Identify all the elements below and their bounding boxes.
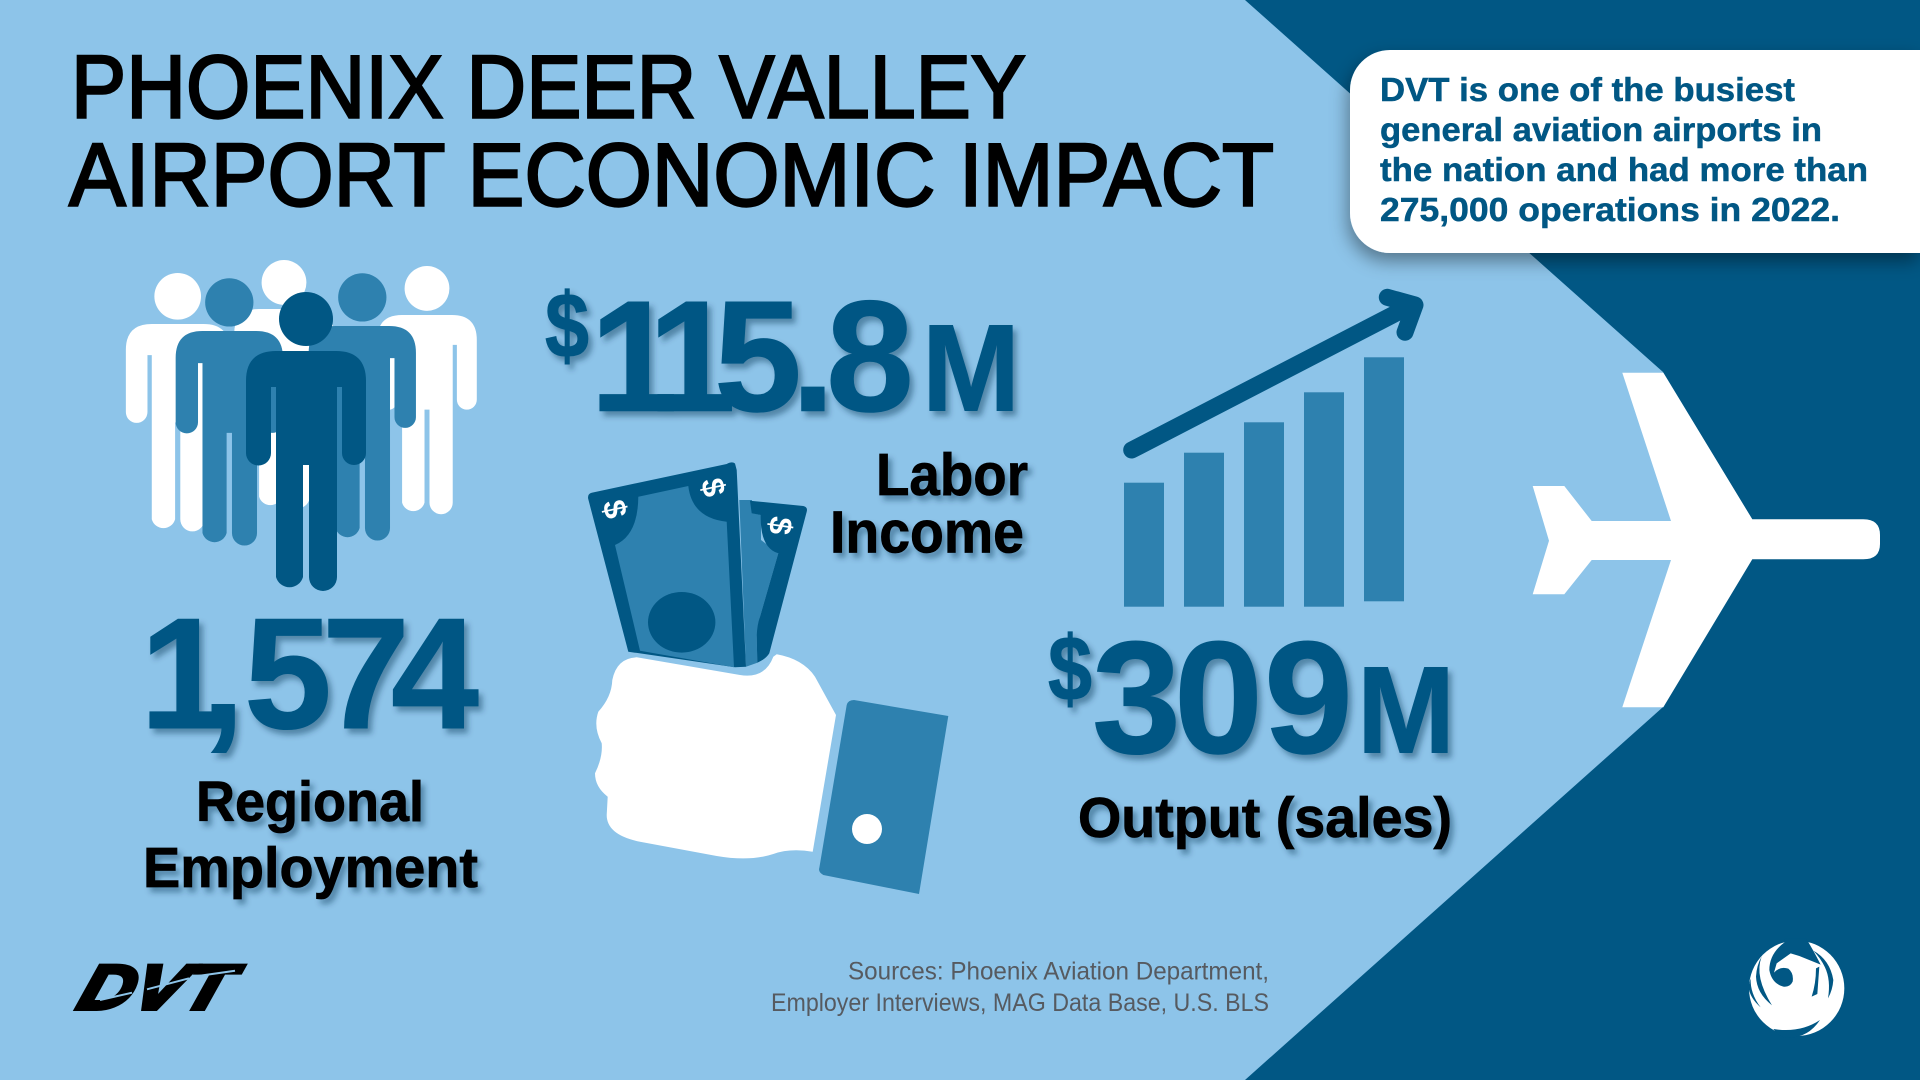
- dollar symbols: $: [762, 514, 800, 537]
- person: blue right: [309, 273, 416, 541]
- callout: busiest airport: the nation and had more than: [1380, 151, 1868, 188]
- callout: busiest airport: general aviation airports in: [1380, 111, 1822, 148]
- back bill: [739, 500, 807, 667]
- front bill: [588, 462, 746, 667]
- stat: output amount: $: [1048, 618, 1092, 720]
- callout: busiest airport: 275,000 operations in 2022.: [1380, 191, 1840, 228]
- stat: labor income amount: 115.8: [590, 269, 914, 445]
- person: blue left: [176, 278, 283, 546]
- label: labor income: Income: [830, 500, 1024, 566]
- person: dark front: [246, 292, 366, 591]
- icon: money bills: [588, 462, 807, 667]
- person: white left: [126, 273, 230, 531]
- title: PHOENIX DEER VALLEY: [71, 36, 1026, 136]
- stat: regional employment number: 1,574: [140, 586, 479, 762]
- stat: output amount: 309: [1092, 608, 1353, 787]
- logo: DVT: DVT: [71, 951, 250, 1023]
- dollar symbols: [596, 475, 800, 537]
- callout: busiest airport: [1350, 50, 1920, 253]
- icon: group of people: [126, 260, 477, 591]
- stat: labor income amount: [545, 269, 1020, 445]
- stat: labor income amount: M: [922, 301, 1020, 438]
- title: [69, 36, 1274, 224]
- label: regional employment: Employment: [143, 836, 478, 900]
- bar chart: [1124, 357, 1404, 607]
- dollar symbols: $: [694, 475, 733, 500]
- label: regional employment: [143, 770, 478, 900]
- panel: dark arrow-shaped background: [1245, 0, 1920, 1080]
- label: regional employment: Regional: [196, 770, 424, 834]
- icon: airplane: [1533, 373, 1880, 707]
- stat: output amount: M: [1357, 643, 1455, 780]
- text block: sources: Sources: Phoenix Aviation Department,: [848, 958, 1269, 986]
- label: labor income: Labor: [876, 442, 1028, 508]
- stat: labor income amount: $: [545, 275, 589, 377]
- callout: busiest airport: DVT is one of the busiest: [1380, 71, 1795, 108]
- icon: sleeve cuff with button: [819, 700, 948, 894]
- stat: output amount: [1048, 608, 1455, 787]
- label: labor income: [830, 442, 1028, 566]
- dollar symbols: $: [596, 497, 634, 522]
- icon: hand holding money: [595, 654, 836, 858]
- text block: sources: Employer Interviews, MAG Data Base, U.S. BLS: [771, 989, 1269, 1017]
- person: white back centre: [234, 260, 334, 508]
- person: white right: [377, 266, 477, 514]
- logo: city of Phoenix bird: [1748, 938, 1844, 1038]
- arrow: rising trend: [1132, 297, 1415, 450]
- label: output sales: Output (sales): [1078, 786, 1452, 850]
- text block: sources: [771, 958, 1269, 1017]
- title: AIRPORT ECONOMIC IMPACT: [69, 124, 1274, 224]
